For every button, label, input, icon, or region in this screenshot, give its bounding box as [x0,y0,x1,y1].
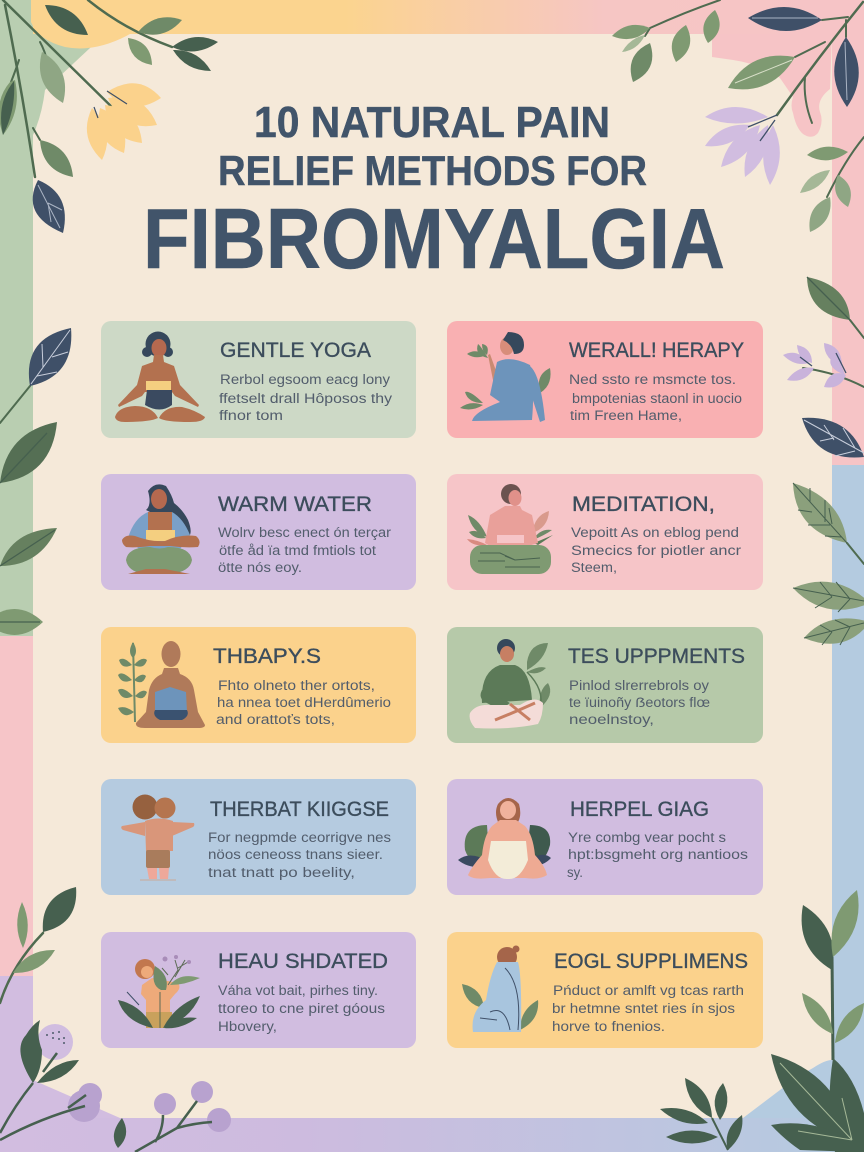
panel: head shaded: ttoreo to cne piret góous [218,1001,385,1016]
panel: supplements: TES UPPPMENTS [568,645,745,668]
panel: herbal therapy: bmpotenias staonl in uocio [572,391,742,406]
icon: figure among plants [118,955,200,1028]
panel: herbal: hpt:bsgmeht org nantioos [568,847,748,862]
icon: man sitting cross-legged with plant [470,639,550,728]
panel: therapeutic massage: For negpmde ceorrigve nes [208,830,391,845]
foliage: left side [0,328,71,635]
panel: supplements: Pinlod slrerrebrols oy [569,678,709,693]
title [143,98,725,287]
panel: therapy [101,627,416,743]
panel: head shaded: HEAU SHDATED [218,950,388,973]
panel: warm water: WARM WATER [218,493,372,516]
foliage: top left corner [0,0,218,233]
icon: woman seated in yoga pose [115,332,205,422]
panel: warm water: Wolrv besc enect ón terçar [218,525,392,540]
panel: gentle yoga: ffnor tom [219,408,283,423]
panel: head shaded: Hbovery, [218,1019,277,1034]
panel: warm water: ötfe åd ïa tmd fmtiols tot [219,543,376,558]
foliage: bottom left corner [0,887,231,1152]
panel: supplements two [447,932,763,1048]
panel: supplements [447,627,763,743]
foliage: top right corner [612,0,864,232]
title: 10 NATURAL PAIN [254,98,610,147]
panel: therapeutic massage: nöos ceneoss tnans sieer. [208,847,383,862]
panel: supplements: te ïuinoñy ẞeotors flœ [569,695,710,710]
title: RELIEF METHODS FOR [218,147,647,194]
icon: person with leaves [460,332,551,422]
panel: therapeutic massage: THERBAT KIIGGSE [210,798,389,821]
panel: meditation: MEDITATION, [572,493,715,516]
panel: meditation: Vepoitt As on eblog pend [571,525,739,540]
panel: gentle yoga: GENTLE YOGA [220,339,371,362]
panel: therapy: and orattoťs tots, [216,712,335,727]
panel: herbal: Yre combg vear pocht s [568,830,726,845]
panel: head shaded: Váha vot bait, pirhes tiny. [218,983,378,998]
foliage: right side [783,277,864,645]
panel: therapy: ha nnea toet dHerdûmerio [217,695,391,710]
panel: herbal therapy [447,321,763,438]
panel: gentle yoga [101,321,416,438]
panel: herbal therapy: WERALL! HERAPY [569,339,744,362]
panel: meditation: Smecics for piotler ancr [571,543,742,558]
panel: gentle yoga: ffetselt drall Hôposos thy [219,391,392,406]
panel: therapy: THBAPY.S [213,645,321,668]
icon: standing figure with arms out [121,794,194,880]
panel: therapeutic massage: tnat tnatt po beelity, [208,865,355,880]
title: FIBROMYALGIA [143,192,725,287]
icon: woman with large leaves [458,798,551,879]
panel: supplements two: Pńduct or amlft vg tcas rarth [553,983,744,998]
panel: head shaded [101,932,416,1048]
icon: bald man meditating beside plant [118,641,205,728]
panel: warm water [101,474,416,590]
panel: supplements two: br hetmne sntet ries ín sjos [552,1001,735,1016]
icon: person meditating on cushion [467,484,553,574]
icon: figure in blue robe with leaves [462,946,538,1032]
panel: gentle yoga: Rerbol egsoom eacg lony [220,372,390,387]
panel: supplements two: EOGL SUPPLIMENS [554,950,748,973]
panel: therapeutic massage [101,779,416,895]
panel: meditation: Steem, [571,560,617,575]
panel: meditation [447,474,763,590]
panel: warm water: ötte nós eoy. [218,560,302,575]
panel: herbal therapy: Ned ssto re msmcte tos. [569,372,736,387]
panel: therapy: Fhto olneto ther ortots, [218,678,375,693]
panel: herbal: HERPEL GIAG [570,798,709,821]
icon: woman sitting cross-legged [122,484,200,574]
panel: supplements two: horve to fnenios. [552,1019,665,1034]
panel: supplements: neoelnstoy, [569,712,654,727]
panel: herbal: sy. [567,865,583,880]
panel: herbal therapy: tim Freen Hame, [570,408,682,423]
panel: herbal [447,779,763,895]
foliage: bottom right corner [660,890,864,1152]
